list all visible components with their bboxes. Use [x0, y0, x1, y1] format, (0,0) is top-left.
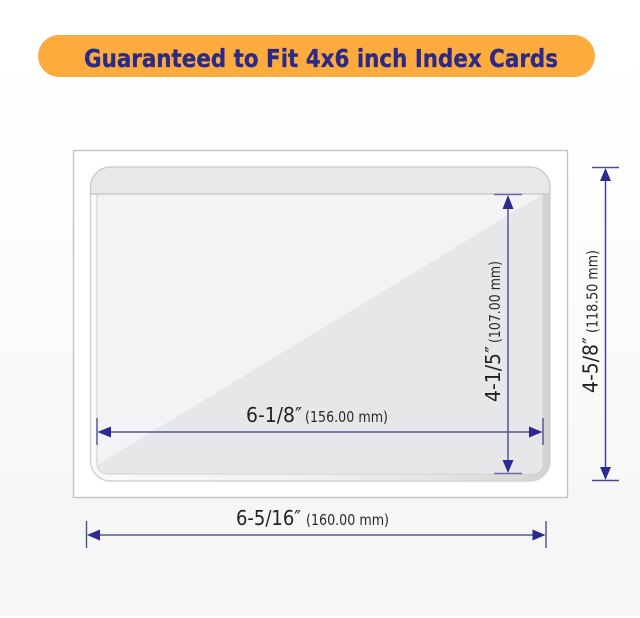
dimension: inner height 4-1/5: 4-1/5″ [481, 346, 505, 402]
dimension: inner height 4-1/5 [481, 194, 522, 474]
dimension: outer height 4-5/8: (118.50 mm) [584, 250, 602, 333]
outer sheet [74, 150, 568, 498]
pocket inner panel [97, 194, 543, 474]
title banner [38, 35, 595, 77]
dimension: inner width 6-1/8: (156.00 mm) [305, 408, 388, 426]
diagonal shaded fold [98, 194, 542, 474]
header band [90, 167, 550, 194]
card pocket [90, 167, 550, 481]
dimension: outer width 6-5/16: (160.00 mm) [306, 511, 389, 529]
dimension: outer width 6-5/16 [86, 506, 546, 548]
dimension: inner width 6-1/8: 6-1/8″ [246, 403, 302, 427]
dimension: inner height 4-1/5: (107.00 mm) [486, 261, 504, 343]
dimension: outer width 6-5/16: 6-5/16″ [236, 506, 301, 530]
dimension: inner width 6-1/8 [97, 403, 543, 445]
dimension: outer height 4-5/8: 4-5/8″ [578, 337, 602, 393]
dimension: outer height 4-5/8 [578, 168, 619, 480]
title banner: Guaranteed to Fit 4x6 inch Index Cards [84, 44, 558, 73]
